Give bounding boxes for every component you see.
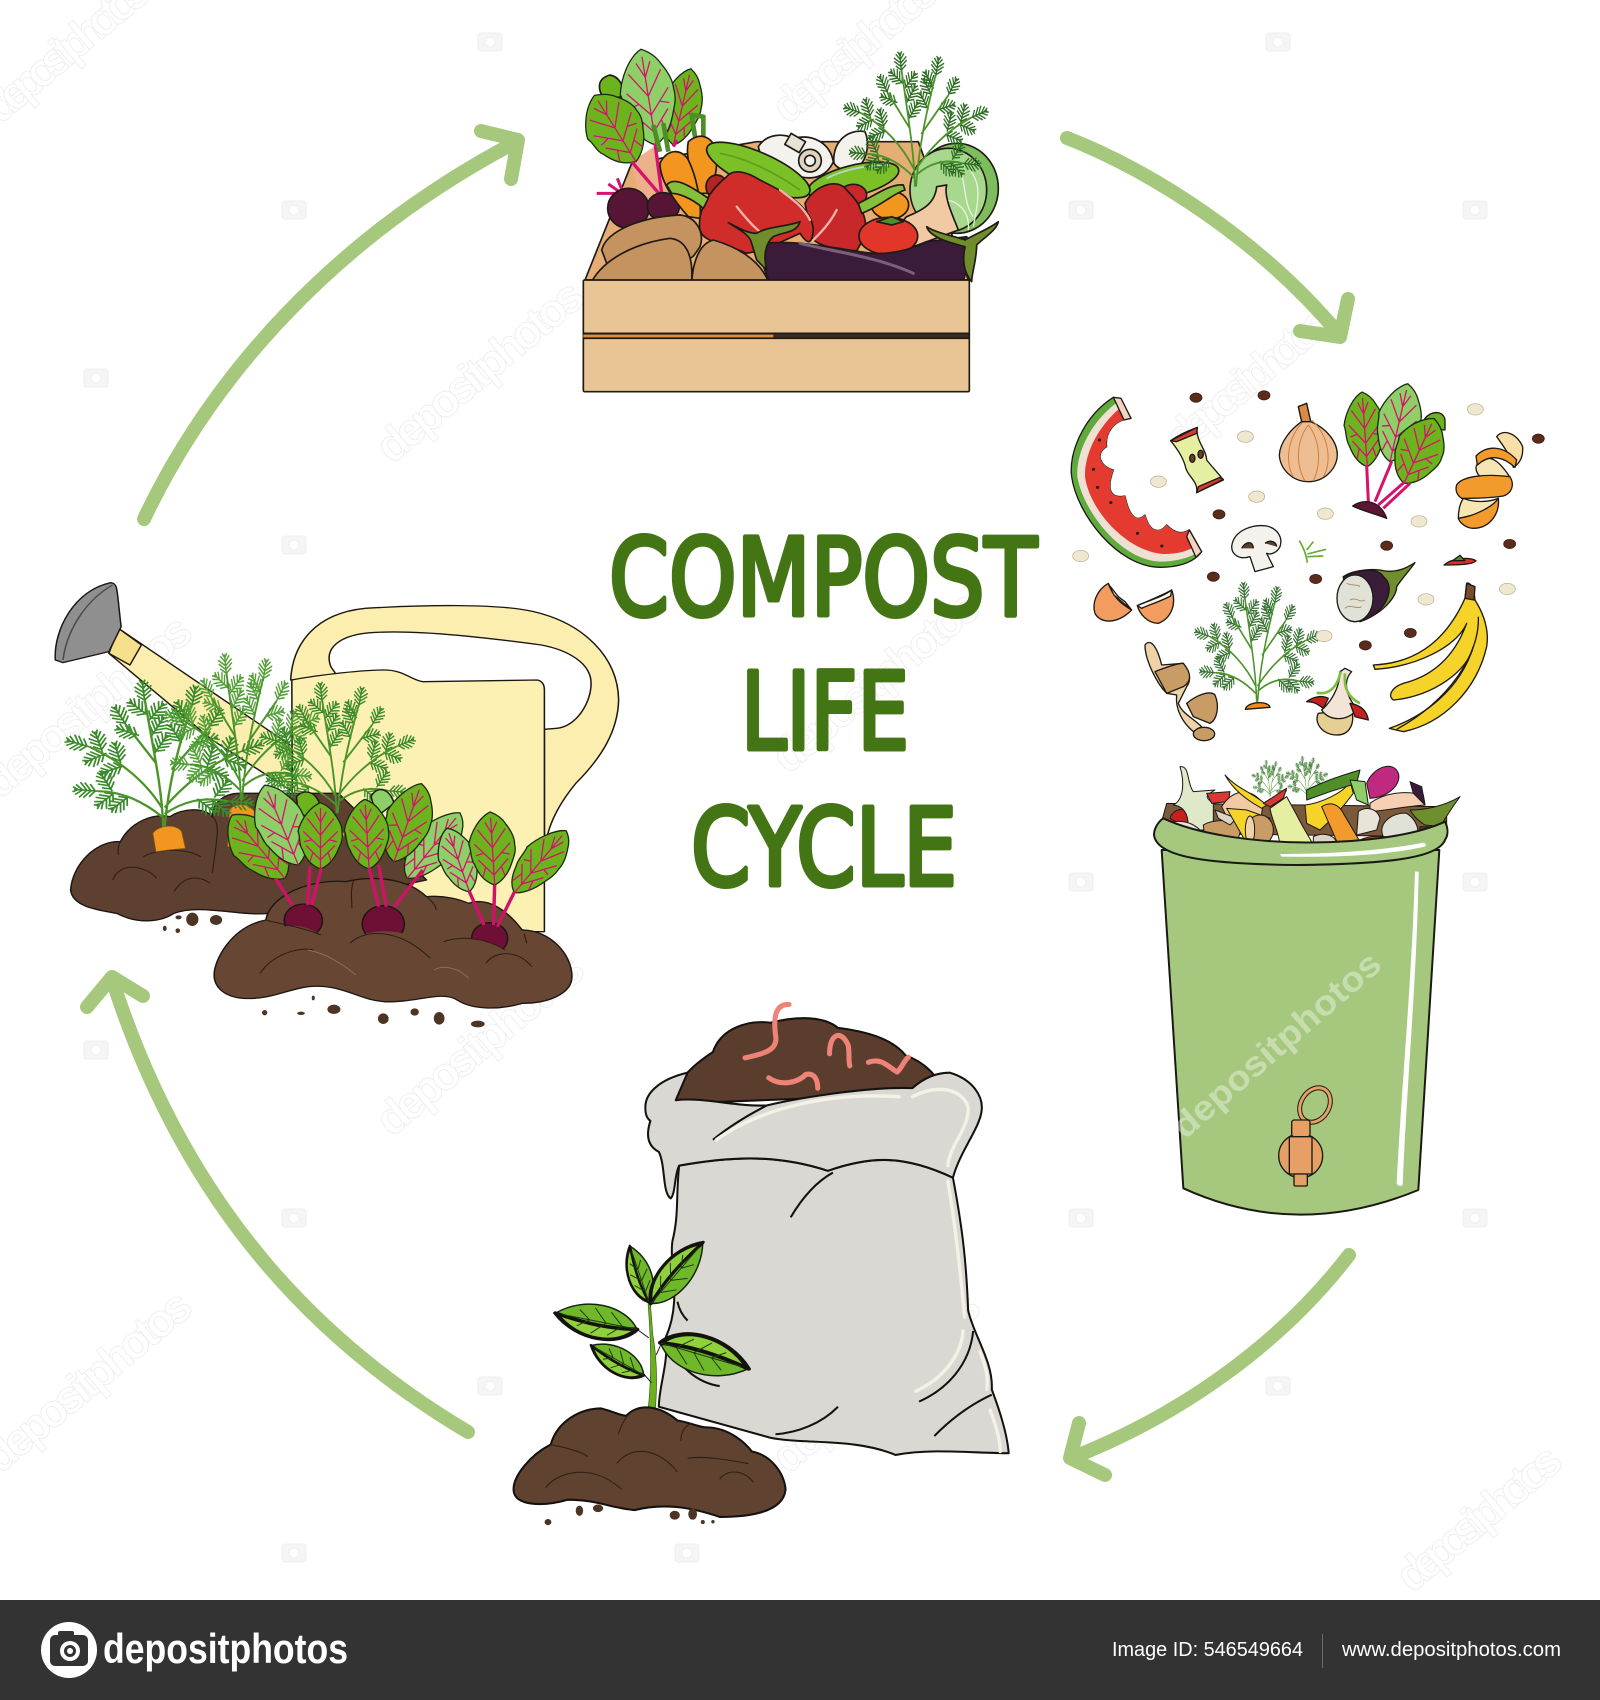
- soil ridges: [260, 880, 532, 978]
- cabbage: [910, 143, 998, 233]
- beets: [275, 865, 515, 954]
- beet greens: [211, 778, 582, 903]
- tap: [1279, 1082, 1337, 1186]
- watermark pattern: depositphotos: [761, 579, 990, 783]
- front soil mound: [214, 878, 572, 1008]
- carrots: [653, 115, 717, 218]
- footer logo icon: [41, 1622, 97, 1678]
- crate interior: [585, 142, 968, 280]
- onion: [1279, 403, 1337, 482]
- footer bar: [0, 1600, 1600, 1700]
- arrow: bin to sack: [1070, 1255, 1349, 1475]
- eggplant: [728, 222, 998, 282]
- carrot top: [1193, 581, 1322, 709]
- watermelon rind: [1071, 397, 1202, 567]
- arrow: harvest returns to crate: [144, 131, 518, 519]
- panel: garden with watering can: [55, 583, 619, 1027]
- seedling: [552, 1233, 753, 1448]
- image id: Image ID: 546549664: [1112, 1639, 1303, 1661]
- cauliflower stalk: [1307, 668, 1368, 735]
- seeds and beans: [1073, 391, 1544, 650]
- sack top fold: [645, 1073, 982, 1198]
- bin watermark: depositphotos: [1165, 944, 1389, 1146]
- chard: [1342, 379, 1456, 518]
- sack body: [659, 1158, 1009, 1455]
- dill sprig: [1299, 541, 1326, 563]
- eggshells: [1094, 583, 1174, 623]
- cucumbers: [700, 131, 902, 209]
- title: COMPOST: [609, 517, 1038, 641]
- bin contents: [1158, 756, 1460, 845]
- apple core: [1171, 427, 1223, 493]
- panel: kitchen scraps: [1071, 379, 1544, 741]
- panel: compost sack with seedling: [514, 1004, 1009, 1525]
- panel: compost bin: [1154, 756, 1460, 1215]
- footer logo text: depositphotos: [103, 1625, 348, 1672]
- orange peel: [1456, 433, 1523, 528]
- eggplant slice: [1337, 563, 1415, 622]
- pepper scrap: [1444, 555, 1476, 565]
- banana peel: [1373, 583, 1487, 732]
- watermark pattern: depositphotos: [1385, 1433, 1572, 1602]
- bin highlights: [1280, 843, 1426, 1186]
- watermark pattern: depositphotos: [1155, 294, 1342, 463]
- compost in sack: [676, 1018, 937, 1104]
- arrow: crate to scraps: [1067, 138, 1348, 337]
- watermark pattern: depositphotos: [365, 269, 594, 473]
- soil mound: [514, 1407, 786, 1517]
- website: www.depositphotos.com: [1341, 1639, 1561, 1661]
- bin body: [1162, 850, 1439, 1215]
- soil crumbs: [545, 1505, 715, 1525]
- arrow: sack to garden: [87, 977, 468, 1432]
- divider: [1322, 1634, 1323, 1668]
- title: CYCLE: [691, 787, 957, 911]
- potato peel: [1145, 642, 1217, 741]
- beets: [597, 178, 679, 228]
- potatoes: [592, 215, 768, 282]
- worms: [745, 1004, 908, 1088]
- onion: [903, 185, 958, 247]
- title: LIFE: [741, 651, 909, 775]
- watermark pattern: depositphotos: [761, 1279, 990, 1483]
- peppers: [667, 172, 909, 253]
- panel: vegetable crate: [570, 45, 998, 392]
- carrot tops: [63, 652, 418, 827]
- tomato: [859, 217, 918, 255]
- mushrooms: [758, 131, 867, 178]
- watermark pattern: depositphotos: [365, 942, 594, 1146]
- soil crumbs: [163, 913, 485, 1027]
- chard leaves: [570, 45, 709, 200]
- back soil mound: [71, 793, 427, 921]
- carrots: [153, 805, 345, 852]
- sack folds: [671, 1089, 1000, 1451]
- carrot tops: [842, 51, 990, 187]
- crate planks: [583, 280, 969, 392]
- bin rim: [1154, 818, 1447, 865]
- title: [609, 517, 1038, 911]
- watering can: [55, 583, 619, 932]
- mushroom: [1232, 526, 1281, 572]
